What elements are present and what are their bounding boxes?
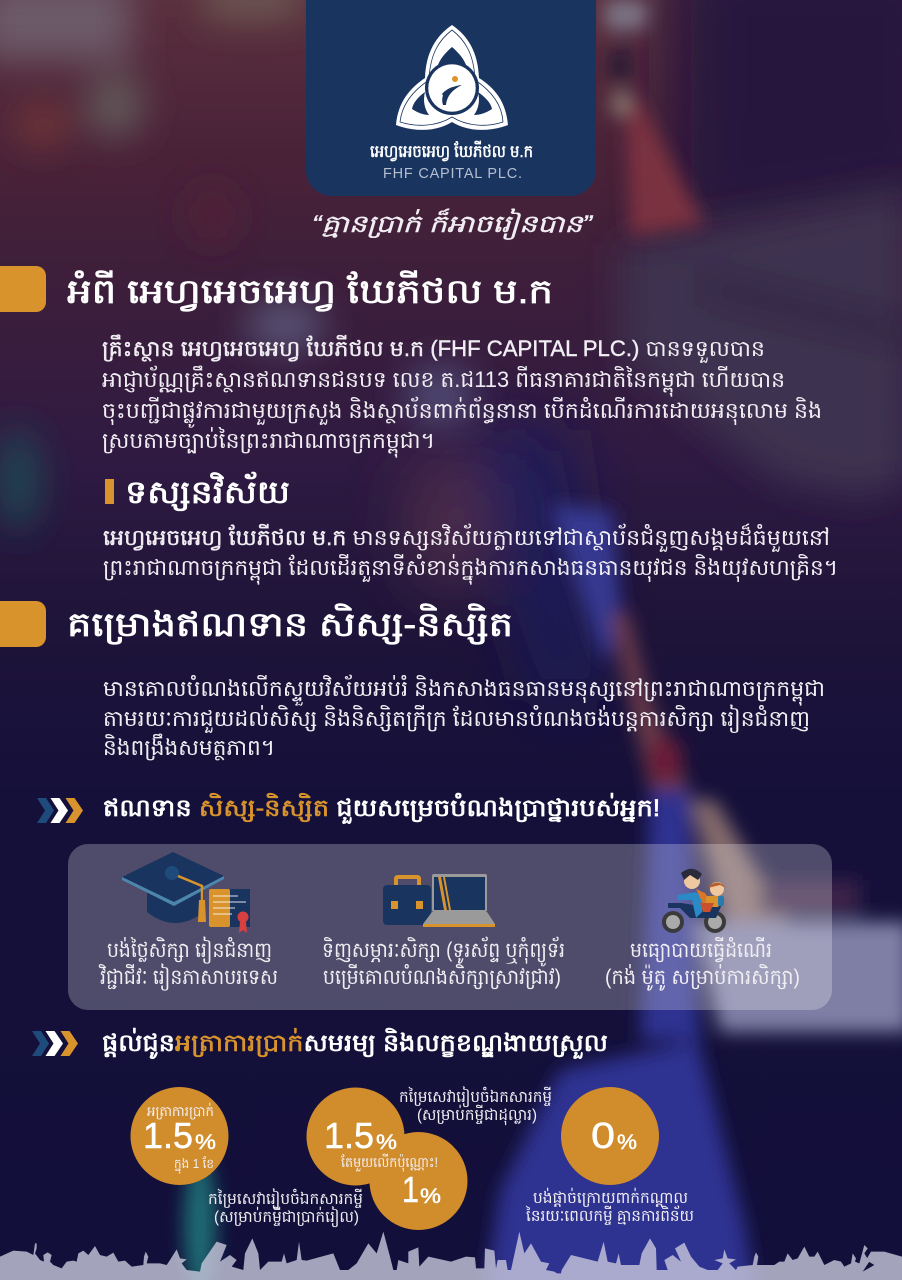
text block: about paragraph — [102, 334, 822, 458]
heading: about: អំពី អេហ្វអេចអេហ្វ ឃែភីថល ម.ក — [67, 270, 553, 312]
text: tuition: វិជ្ជាជីវៈ រៀនភាសាបរទេស — [98, 963, 278, 991]
caption: prepayment: បង់ផ្តាច់ក្រោយពាក់កណ្តាល — [533, 1187, 688, 1207]
rate circle: monthly interest: % — [195, 1131, 216, 1154]
rate circle: monthly interest: 1.5 — [143, 1115, 193, 1156]
rate circle: riel loan fee: % — [420, 1185, 441, 1208]
text block: vision paragraph: ព្រះរាជាណាចក្រកម្ពុជា ដែលដើរតួនាទីសំខាន់ក្នុងការកសាងធនធានយុវជន និងយុវសហគ្រិន។ — [103, 554, 838, 585]
text block: vision paragraph: អេហ្វអេចអេហ្វ ឃែភីថល ម.ក មានទស្សនវិស័យក្លាយទៅជាស្ថាប័នជំនួញសង្គមដ៏ធំមួយនៅ — [103, 523, 830, 552]
rate circle: zero prepayment: 0 — [591, 1115, 615, 1156]
text: transport — [605, 937, 800, 991]
logo English name: FHF CAPITAL PLC. — [383, 166, 522, 182]
rate circle: riel loan fee — [370, 1132, 468, 1230]
text block: about paragraph: គ្រឹះស្ថាន អេហ្វអេចអេហ្វ ឃែភីថល ម.ក (FHF CAPITAL PLC.) បានទទួលបាន — [102, 334, 765, 363]
logo Khmer name: អេហ្វអេចអេហ្វ ឃែភីថល ម.ក — [370, 140, 533, 162]
rate circle: monthly interest: អត្រាការប្រាក់ — [147, 1102, 214, 1120]
text block: vision paragraph — [103, 523, 838, 585]
rate circle: dollar loan fee: % — [376, 1131, 397, 1154]
heading: vision: ទស្សនវិស័យ — [125, 471, 290, 511]
caption: prepayment — [525, 1187, 694, 1225]
text block: about paragraph: ស្របតាមច្បាប់នៃព្រះរាជាណាចក្រកម្ពុជា។ — [102, 427, 435, 458]
text: transport: មធ្យោបាយធ្វើដំណើរ — [630, 937, 772, 963]
icon: FHF trefoil emblem — [396, 25, 508, 130]
rate circle: dollar loan fee: តែមួយលើកប៉ុណ្ណោះ! — [341, 1153, 438, 1172]
text: tuition: បង់ថ្លៃសិក្សា រៀនជំនាញ — [107, 936, 272, 964]
tab: orange marker loan project — [0, 601, 46, 647]
icon: graduation cap and diploma — [122, 852, 250, 933]
caption: dollar loan fee: កម្រៃសេវារៀបចំឯកសារកម្ចី — [399, 1086, 552, 1108]
rate circle: riel loan fee: 1 — [402, 1169, 419, 1210]
icon: chevrons row two — [32, 1031, 78, 1056]
skyline silhouette — [0, 1232, 902, 1280]
text block: loan project paragraph: និងពង្រឹងសមត្ថភាព។ — [103, 733, 275, 761]
text block: loan project paragraph: មានគោលបំណងលើកស្ទួយវិស័យអប់រំ និងកសាងធនធានមនុស្សនៅព្រះរាជាណាចក្រកម្ពុជា — [103, 674, 825, 706]
rate circle: dollar loan fee: 1.5 — [324, 1115, 374, 1156]
icon: students on motorbike — [662, 869, 726, 933]
text block: loan project paragraph — [103, 674, 825, 761]
panel: loan uses — [68, 844, 832, 1010]
rate circle: monthly interest — [130, 1087, 228, 1185]
heading: loan project: គម្រោងឥណទាន សិស្ស-និស្សិត — [67, 603, 513, 645]
caption: dollar loan fee: (សម្រាប់កម្ចីជាដុល្លារ) — [417, 1104, 537, 1126]
icon: chevrons row one — [37, 798, 83, 823]
rate circle: dollar loan fee — [306, 1088, 438, 1186]
caption: dollar loan fee — [399, 1086, 552, 1126]
text: equipment: ទិញសម្ភារៈសិក្សា (ទូរស័ព្ទ ឬកុំព្យូទ័រ — [322, 936, 565, 967]
caption: riel loan fee: កម្រៃសេវារៀបចំឯកសារកម្ចី — [208, 1188, 363, 1210]
text: equipment: បម្រើគោលបំណងសិក្សាស្រាវជ្រាវ) — [323, 964, 561, 990]
heading: loan helps: ឥណទាន សិស្ស-និស្សិត ជួយសម្រេចបំណងប្រាថ្នារបស់អ្នក! — [103, 793, 660, 824]
text block: about paragraph: អាជ្ញាប័ណ្ណគ្រឹះស្ថានឥណទានជនបទ លេខ ត.ជ113 ពីធនាគារជាតិនៃកម្ពុជា ហើយបាន — [102, 365, 785, 397]
text: equipment — [322, 936, 565, 990]
text: transport: (កង់ ម៉ូតូ សម្រាប់ការសិក្សា) — [605, 964, 800, 991]
logo panel — [306, 0, 596, 196]
text: tuition — [98, 936, 278, 991]
text block: loan project paragraph: តាមរយៈការជួយដល់សិស្ស និងនិស្សិតក្រីក្រ ដែលមានបំណងចង់បន្តការសិក្សា រៀនជំនាញ — [103, 704, 810, 733]
rate circle: zero prepayment — [561, 1087, 659, 1185]
tagline: “គ្មានប្រាក់ ក៏អាចរៀនបាន” — [312, 208, 593, 240]
caption: riel loan fee: (សម្រាប់កម្ចីជាប្រាក់រៀល) — [214, 1206, 359, 1228]
rate circle: monthly interest: ក្នុង 1 ខែ — [174, 1155, 214, 1174]
heading: interest terms: ផ្តល់ជូនអត្រាការប្រាក់ សមរម្យ និងលក្ខខណ្ឌងាយស្រួល — [102, 1028, 608, 1059]
tab: orange marker about — [0, 266, 46, 312]
caption: riel loan fee — [208, 1188, 363, 1228]
rate circle: zero prepayment: % — [617, 1131, 637, 1154]
text block: about paragraph: ចុះបញ្ជីជាផ្លូវការជាមួយក្រសួង និងស្ថាប័នពាក់ព័ន្ធនានា បើកដំណើរការដោយអនុលោម និង — [102, 396, 822, 428]
caption: prepayment: នៃរយៈពេលកម្ចី គ្មានការពិន័យ — [525, 1205, 694, 1225]
icon: briefcase and laptop — [383, 874, 495, 927]
marker: vision bar — [105, 479, 114, 504]
